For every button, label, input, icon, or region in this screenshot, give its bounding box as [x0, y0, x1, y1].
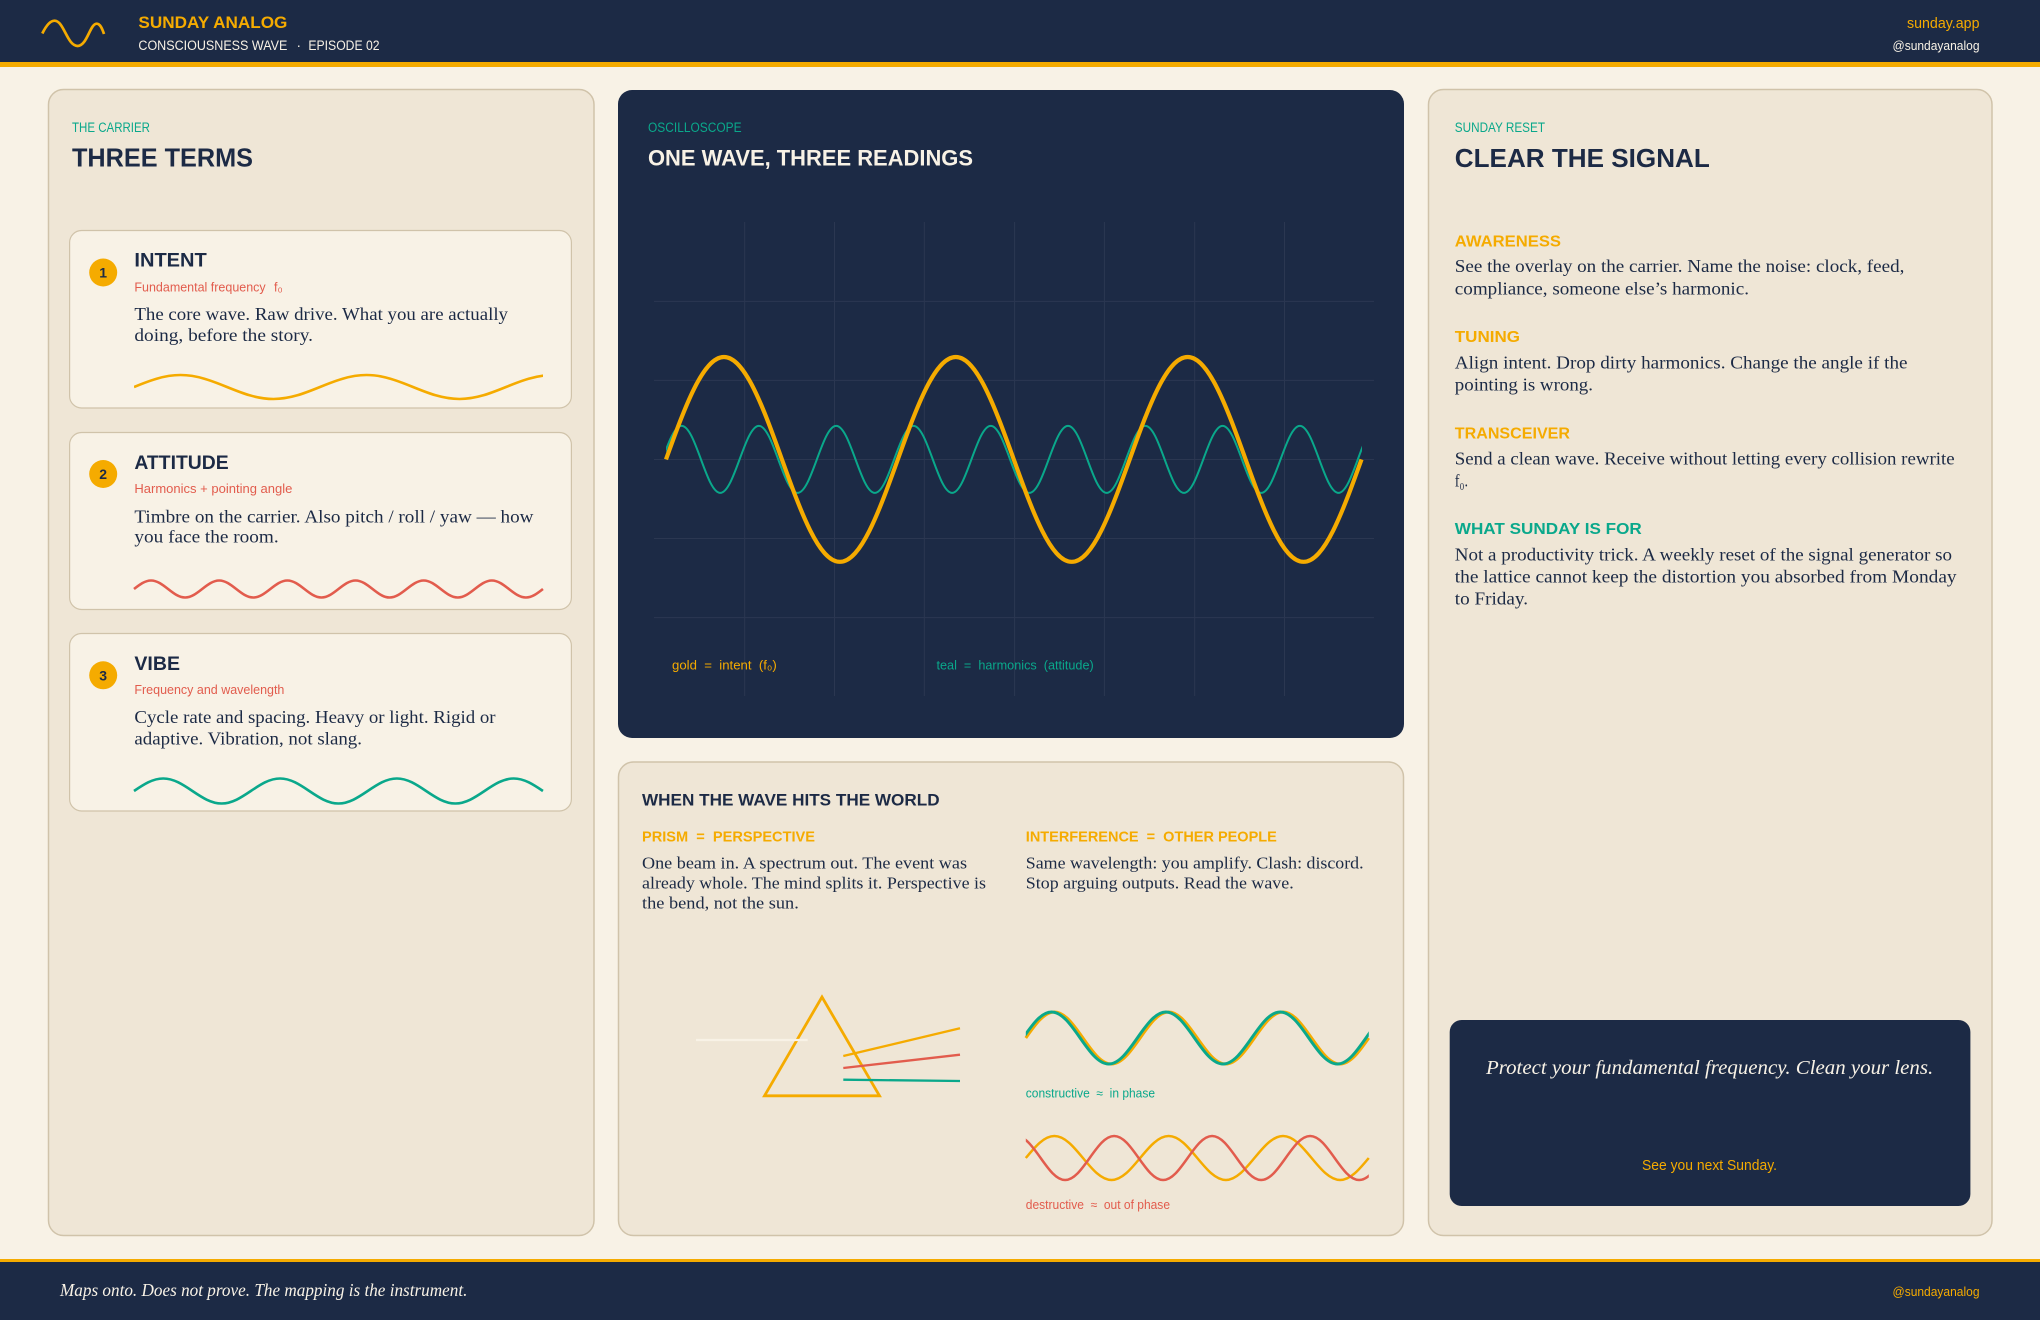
callout: protect your fundamental frequency [1450, 1020, 1970, 1206]
wave: attitude [134, 580, 543, 598]
body: attitude [134, 506, 534, 547]
section: transceiver: f₀. [1455, 470, 1468, 490]
footer tagline: Maps onto. Does not prove. The mapping is the instrument. [59, 1280, 467, 1300]
quote: Protect your fundamental frequency. Clean your lens. [1485, 1057, 1933, 1079]
section: what sunday is for: the lattice cannot keep the distortion you absorbed from Monday [1455, 566, 1957, 586]
badge 2: 2 [99, 466, 107, 482]
section: what sunday is for: to Friday. [1455, 588, 1528, 608]
eyebrow: the carrier: THE CARRIER [72, 120, 150, 135]
card: intent [70, 230, 571, 408]
badge 1: 1 [99, 264, 107, 280]
caption: constructive: constructive ≈ in phase [1026, 1087, 1155, 1101]
body: interference [1026, 853, 1364, 892]
section: awareness: AWARENESS [1455, 234, 1561, 250]
episode line [138, 38, 380, 53]
subheading: interference: INTERFERENCE = OTHER PEOPLE [1026, 830, 1277, 846]
eyebrow: oscilloscope: OSCILLOSCOPE [648, 120, 742, 135]
body: vibe: adaptive. Vibration, not slang. [134, 728, 362, 748]
body: prism: already whole. The mind splits it. Perspective is [642, 873, 986, 892]
icon: sine wave logo [42, 21, 104, 46]
section: transceiver: TRANSCEIVER [1455, 425, 1570, 442]
chart: constructive interference [1023, 1012, 1395, 1064]
body: vibe [134, 707, 496, 748]
section: what sunday is for: Not a productivity trick. A weekly reset of the signal generator so [1455, 544, 1952, 564]
wave: intent [134, 375, 552, 399]
section: tuning [1455, 329, 1908, 395]
section: transceiver: Send a clean wave. Receive without letting every collision rewrite [1455, 448, 1955, 468]
heading: clear the signal: CLEAR THE SIGNAL [1455, 145, 1710, 173]
term: intent: INTENT [134, 250, 207, 272]
section: awareness [1455, 234, 1904, 298]
section: awareness: compliance, someone else’s harmonic. [1455, 278, 1749, 298]
card: attitude [70, 432, 571, 610]
handle: @sundayanalog [1892, 38, 1980, 53]
section: awareness: See the overlay on the carrier. Name the noise: clock, feed, [1455, 256, 1904, 276]
body: vibe: Cycle rate and spacing. Heavy or light. Rigid or [134, 707, 496, 727]
icon: prism diagram [696, 997, 960, 1096]
body: interference: Stop arguing outputs. Read the wave. [1026, 873, 1294, 892]
section: what sunday is for: WHAT SUNDAY IS FOR [1455, 521, 1642, 538]
term: vibe: VIBE [134, 653, 180, 675]
sign-off: See you next Sunday. [1642, 1158, 1777, 1174]
episode line: EPISODE 02 [308, 38, 380, 53]
chart: teal harmonics wave [662, 426, 1377, 493]
site link: sunday.app [1907, 16, 1980, 32]
subtitle: harmonics: Harmonics + pointing angle [134, 481, 292, 496]
heading: three terms: THREE TERMS [72, 145, 253, 173]
panel: oscilloscope [618, 90, 1404, 738]
body: interference: Same wavelength: you amplify. Clash: discord. [1026, 853, 1364, 872]
chart: destructive interference [992, 1136, 1384, 1180]
header bar [0, 0, 2040, 67]
body: prism: One beam in. A spectrum out. The event was [642, 853, 967, 872]
section: transceiver [1455, 425, 1955, 490]
subtitle: fundamental frequency: f₀ [274, 280, 283, 295]
subheading: prism: PRISM = PERSPECTIVE [642, 830, 815, 846]
heading: one wave three readings: ONE WAVE, THREE READINGS [648, 146, 973, 170]
wave: vibe [134, 778, 543, 804]
legend: gold: gold = intent (f₀) [672, 658, 777, 673]
panel: when the wave hits the world [618, 762, 1404, 1236]
caption: destructive: destructive ≈ out of phase [1026, 1198, 1170, 1212]
legend: teal: teal = harmonics (attitude) [936, 658, 1094, 673]
badge 3: 3 [99, 667, 107, 683]
footer bar [0, 1259, 2040, 1320]
card: vibe [70, 634, 571, 811]
section: what sunday is for [1455, 521, 1957, 608]
body: attitude: you face the room. [134, 527, 279, 547]
body: intent [134, 304, 508, 345]
subtitle: fundamental frequency: Fundamental frequency [134, 280, 266, 295]
episode line: · [296, 38, 301, 53]
badge 2 [89, 460, 117, 488]
badge 3 [89, 661, 117, 689]
brand name: SUNDAY ANALOG [138, 14, 287, 32]
footer handle: @sundayanalog [1892, 1284, 1980, 1299]
panel: three terms [48, 90, 594, 1236]
eyebrow: sunday reset: SUNDAY RESET [1455, 120, 1545, 135]
heading: when the wave hits the world: WHEN THE WAVE HITS THE WORLD [642, 792, 940, 810]
body: intent: doing, before the story. [134, 325, 313, 345]
episode line: CONSCIOUSNESS WAVE [138, 38, 287, 53]
badge 1 [89, 258, 117, 286]
section: tuning: Align intent. Drop dirty harmonics. Change the angle if the [1455, 353, 1908, 373]
body: intent: The core wave. Raw drive. What you are actually [134, 304, 508, 324]
section: tuning: TUNING [1455, 329, 1520, 346]
body: prism: the bend, not the sun. [642, 893, 799, 912]
body: prism [642, 853, 986, 912]
panel: clear the signal [1428, 90, 1992, 1236]
section: tuning: pointing is wrong. [1455, 375, 1593, 395]
subtitle: frequency and wavelength: Frequency and wavelength [134, 682, 284, 697]
term: attitude: ATTITUDE [134, 452, 229, 474]
chart: gold fundamental wave [666, 357, 1362, 562]
body: attitude: Timbre on the carrier. Also pitch / roll / yaw — how [134, 506, 534, 526]
